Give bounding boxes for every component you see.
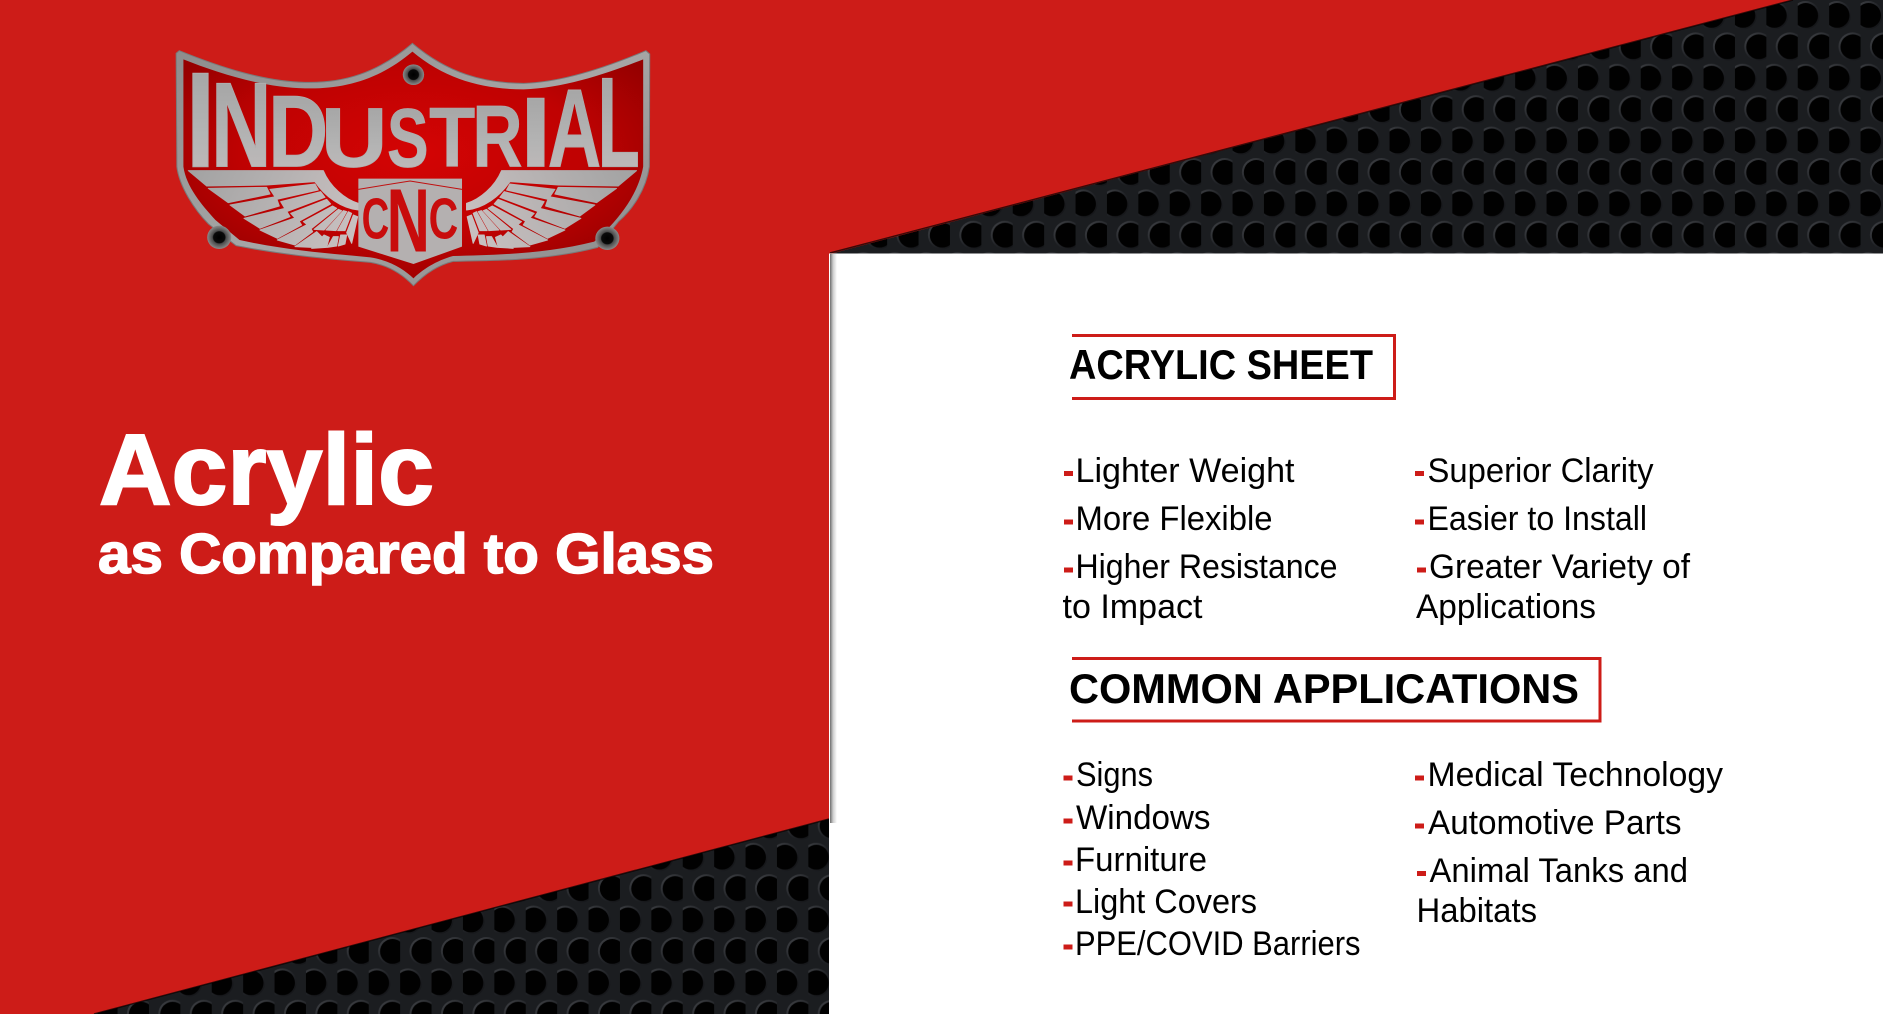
list: acrylic benefits left column: Lighter Weight — [1076, 452, 1295, 490]
list: applications left column — [1064, 756, 1360, 963]
list: applications left column: Light Covers — [1075, 883, 1257, 921]
list: applications right column: Habitats — [1416, 892, 1537, 930]
logo: center CNC plate — [358, 172, 462, 272]
list: applications right column — [1415, 756, 1723, 930]
list: applications left column: PPE/COVID Barriers — [1075, 925, 1360, 963]
logo: center CNC plate: C — [429, 187, 458, 251]
list: applications right column: Animal Tanks and — [1430, 852, 1688, 890]
logo: word INDUSTRIAL: N — [211, 58, 271, 193]
logo: word INDUSTRIAL: I — [520, 77, 552, 188]
logo: word INDUSTRIAL: S — [387, 91, 429, 185]
logo: left wing — [188, 171, 358, 248]
list: acrylic benefits right column: Superior Clarity — [1428, 452, 1654, 490]
logo: right wing — [467, 171, 637, 248]
list: acrylic benefits left column: More Flexible — [1076, 500, 1272, 538]
logo: center CNC plate: C — [362, 188, 389, 252]
list: applications left column: Windows — [1076, 799, 1210, 837]
list: applications left column: Furniture — [1075, 841, 1207, 879]
list: applications left column: Signs — [1076, 756, 1153, 794]
logo: word INDUSTRIAL: A — [548, 67, 601, 191]
list: applications right column: Automotive Parts — [1428, 804, 1682, 842]
logo: word INDUSTRIAL — [186, 43, 640, 196]
title — [98, 414, 714, 586]
logo: word INDUSTRIAL: U — [321, 90, 387, 185]
logo: center CNC plate: N — [387, 172, 430, 272]
list: acrylic benefits right column — [1415, 452, 1691, 626]
perforated metal band: top right — [830, 0, 1883, 254]
title line: Acrylic: Acrylic — [99, 414, 434, 526]
list: applications right column: Medical Technology — [1428, 756, 1723, 794]
white content panel — [829, 254, 1883, 1014]
logo: word INDUSTRIAL: I — [186, 43, 215, 196]
logo: metal shield outline — [176, 43, 650, 286]
list: acrylic benefits right column: Applications — [1416, 588, 1596, 626]
list: acrylic benefits left column: Higher Resistance — [1076, 548, 1338, 586]
logo: red inner field — [183, 52, 643, 278]
heading: Acrylic Sheet: ACRYLIC SHEET — [1069, 341, 1373, 388]
logo: word INDUSTRIAL: D — [268, 75, 328, 189]
list: acrylic benefits right column: Greater Variety of — [1429, 548, 1691, 586]
list: acrylic benefits left column — [1062, 452, 1338, 626]
logo: Industrial CNC badge — [176, 43, 650, 286]
logo: screws — [207, 64, 619, 250]
heading: Common Applications: COMMON APPLICATIONS — [1069, 665, 1579, 712]
list: acrylic benefits left column: to Impact — [1062, 588, 1203, 626]
list: acrylic benefits right column: Easier to Install — [1428, 500, 1647, 538]
perforated metal band: bottom — [94, 819, 829, 1014]
logo: word INDUSTRIAL: T — [429, 90, 475, 185]
logo: word INDUSTRIAL: L — [598, 51, 640, 194]
logo: word INDUSTRIAL: R — [472, 87, 523, 186]
subtitle line: as Compared to Glass — [98, 522, 714, 586]
